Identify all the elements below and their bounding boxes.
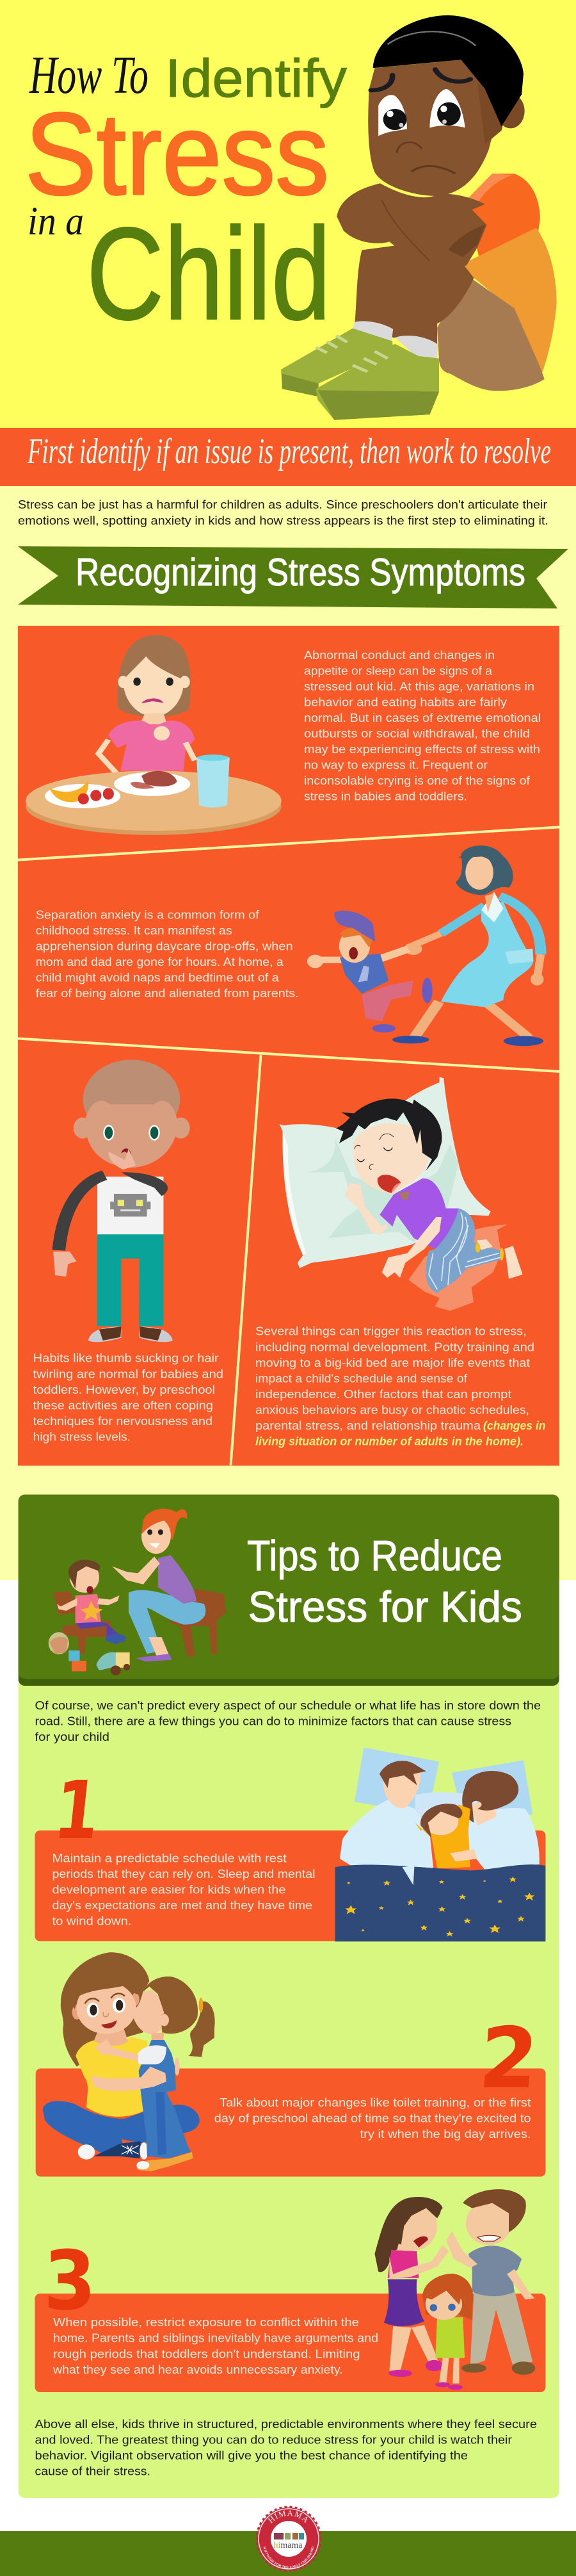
text: appetite and sleep: behavior and eating habits are fairly (304, 696, 507, 709)
text: triggers (255, 1325, 545, 1447)
numeral 3: 3 (44, 2233, 96, 2329)
text: closing paragraph: Above all else, kids thrive in structured, predictable environments where they feel secure (35, 2418, 537, 2431)
text: intro to tips: for your child (35, 1731, 109, 1743)
numeral 3: 3 (44, 2233, 96, 2329)
text: triggers: independence. Other factors that can prompt (255, 1388, 511, 1401)
text: separation anxiety: Separation anxiety is a common form of (36, 909, 260, 922)
text: habits: Habits like thumb sucking or hair (33, 1352, 219, 1365)
illustration: mother talking with child (49, 1509, 226, 1675)
tips header (19, 1495, 559, 1686)
title (25, 45, 347, 347)
text: habits: techniques for nervousness and (33, 1415, 212, 1428)
text: triggers: living situation or number of adults in the home). (255, 1435, 524, 1447)
illustration: sleeping boy on pillow (280, 1077, 523, 1311)
text: tip 1: day's expectations are met and they have time (52, 1899, 312, 1912)
text: triggers: Several things can trigger this reaction to stress, (255, 1325, 527, 1338)
text: triggers: (changes in (483, 1419, 545, 1432)
logo: HiMama badge (256, 2506, 321, 2572)
text: appetite and sleep: inconsolable crying is one of the signs of (304, 774, 531, 787)
illustration: girl at table (26, 635, 282, 835)
text: closing paragraph: behavior. Vigilant observation will give you the best chance of identifying the (35, 2449, 468, 2462)
text: tip 1: to wind down. (52, 1914, 132, 1927)
title: Stress (25, 88, 329, 219)
text: tip 1: development are easier for kids when the (52, 1883, 286, 1896)
text: intro to tips (35, 1699, 541, 1743)
text: tip 3: home. Parents and siblings inevitably have arguments and (53, 2332, 378, 2345)
tips header: Stress for Kids (248, 1583, 522, 1631)
logo: HiMama badge: HIMAMA (268, 2511, 307, 2523)
intro text: emotions well, spotting anxiety in kids and how stress appears is the first step to eliminating it. (18, 514, 548, 527)
illustration: parents arguing, child crying (374, 2189, 535, 2390)
text: habits: high stress levels. (33, 1430, 131, 1443)
text: habits (33, 1352, 223, 1443)
panel: recognizing symptoms (18, 626, 559, 1465)
logo: HiMama badge: himama (273, 2541, 303, 2550)
text: tip 3 (52, 2316, 378, 2376)
text: habits: toddlers. However, by preschool (33, 1383, 215, 1396)
title: Identify (165, 48, 347, 108)
text: triggers: parental stress, and relationship trauma (255, 1419, 481, 1432)
text: appetite and sleep (304, 649, 541, 803)
text: closing paragraph: and loved. The greatest thing you can do to reduce stress for your child is watch their (35, 2434, 512, 2447)
text: appetite and sleep: appetite or sleep can be signs of a (304, 664, 493, 677)
illustration: sad boy hugging knees (281, 15, 557, 420)
text: appetite and sleep: normal. But in cases of extreme emotional (304, 712, 541, 724)
text: intro to tips: Of course, we can't predict every aspect of our schedule or what life has in store down the (35, 1699, 541, 1712)
panel: tips body (19, 1495, 559, 2498)
footer band (0, 2531, 576, 2576)
numeral 2: 2 (476, 2009, 541, 2107)
tip 1 card (35, 1748, 545, 1941)
numeral 2: 2 (476, 2009, 541, 2107)
text: triggers: anxious behaviors are busy or chaotic schedules, (255, 1403, 529, 1416)
ribbon heading: recognizing stress symptoms (18, 546, 568, 608)
title: in a (28, 200, 84, 243)
text: tip 3: rough periods that toddlers don't understand. Limiting (53, 2347, 360, 2360)
illustration: boy sucking thumb (53, 1059, 190, 1342)
title: How To (29, 45, 148, 105)
text: appetite and sleep: stressed out kid. At this age, variations in (304, 680, 534, 693)
text: tip 2: try it when the big day arrives. (360, 2128, 531, 2140)
background: pale yellow body (0, 486, 576, 1580)
text: tip 1 (52, 1852, 315, 1927)
text: triggers: including normal development. Potty training and (255, 1341, 534, 1353)
numeral 1 (59, 1779, 93, 1838)
text: triggers: moving to a big-kid bed are major life events that (255, 1357, 530, 1369)
text: appetite and sleep: outbursts or social withdrawal, the child (304, 727, 530, 740)
tips header: Tips to Reduce (247, 1532, 502, 1580)
tip 2 card (36, 1952, 545, 2176)
text: separation anxiety (36, 909, 299, 1000)
numeral 2 (484, 2025, 531, 2087)
text: closing paragraph (35, 2418, 537, 2478)
text: tip 1: periods that they can rely on. Sleep and mental (52, 1868, 315, 1880)
text: appetite and sleep: stress in babies and toddlers. (304, 790, 467, 803)
text: tip 2: Talk about major changes like toilet training, or the first (220, 2096, 531, 2109)
text: habits: twirling are normal for babies and (33, 1367, 223, 1380)
text: separation anxiety: mom and dad are gone for hours. At home, a (36, 956, 284, 968)
background: white lower (0, 1580, 576, 2531)
text: appetite and sleep: may be experiencing effects of stress with (304, 743, 540, 756)
text: habits: these activities are often coping (33, 1399, 213, 1412)
text: separation anxiety: child might avoid naps and bedtime out of a (36, 972, 280, 984)
logo: HiMama badge: SOFTWARE FOR THE EARLY CHILDHOOD (264, 2547, 314, 2568)
numeral 1: 1 (50, 1764, 104, 1857)
text: intro to tips: road. Still, there are a few things you can do to minimize factors that can cause stress (35, 1715, 511, 1728)
text: separation anxiety: apprehension during daycare drop-offs, when (36, 940, 293, 953)
banner: first identify (0, 428, 576, 486)
text: tip 2: day of preschool ahead of time so that they're excited to (214, 2112, 531, 2125)
illustration: mother and daughter hugging (43, 1952, 215, 2171)
intro text: Stress can be just has a harmful for children as adults. Since preschoolers don't articulate their (18, 498, 547, 511)
text: tip 2 (214, 2096, 531, 2140)
text: tip 1: Maintain a predictable schedule with rest (52, 1852, 287, 1864)
text: tip 3: what they see and hear avoids unnecessary anxiety. (52, 2363, 343, 2376)
text: closing paragraph: cause of their stress. (35, 2465, 150, 2478)
numeral 1: 1 (50, 1764, 104, 1857)
illustration: family sleeping (335, 1748, 545, 1941)
text: appetite and sleep: no way to express it. Frequent or (304, 758, 488, 771)
illustration: mother pulling crying child (307, 845, 544, 1046)
intro text (18, 498, 548, 527)
numeral 3 (49, 2248, 90, 2310)
text: triggers: impact a child's schedule and sense of (255, 1372, 468, 1385)
text: tip 3: When possible, restrict exposure to conflict within the (53, 2316, 359, 2329)
text: separation anxiety: fear of being alone and alienated from parents. (36, 987, 299, 1000)
background: header yellow (0, 0, 576, 428)
text: separation anxiety: childhood stress. It can manifest as (36, 924, 232, 937)
text: appetite and sleep: Abnormal conduct and changes in (304, 649, 495, 662)
title: Child (86, 200, 331, 347)
tip 3 card (35, 2189, 545, 2392)
